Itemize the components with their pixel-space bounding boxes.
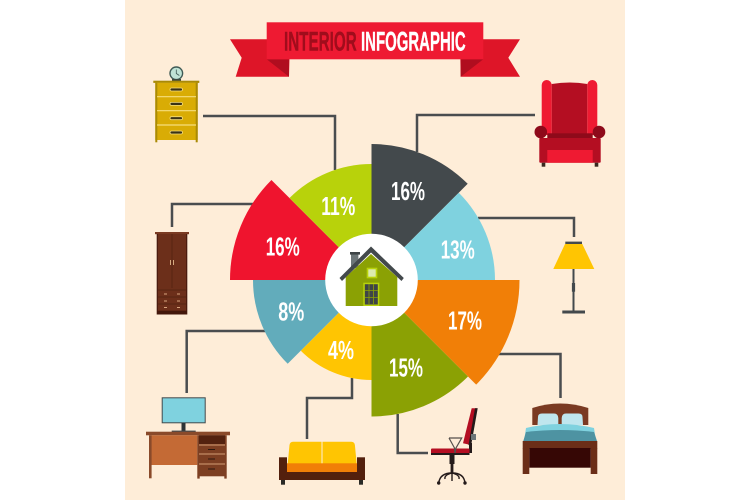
- label: 16% dark: 16%: [391, 176, 425, 206]
- icon: floor lamp: [553, 242, 594, 314]
- wedge: light blue 13%: [372, 193, 495, 280]
- title text: INFOGRAPHIC: [361, 27, 466, 57]
- center circle with house icon: [325, 234, 418, 326]
- connector lines: [172, 115, 574, 453]
- icon: computer desk: [146, 397, 230, 479]
- icon: armchair: [534, 80, 605, 167]
- wedge: orange 17%: [372, 280, 520, 385]
- icon: wardrobe: [155, 232, 189, 314]
- label: 13%: 13%: [441, 234, 475, 264]
- icon: bed: [523, 404, 597, 474]
- label: 11%: 11%: [321, 191, 355, 221]
- wedge: teal 8%: [253, 280, 372, 364]
- wedge: lime 11%: [290, 164, 372, 280]
- label: 8%: 8%: [278, 297, 304, 327]
- label: 17%: 17%: [448, 306, 482, 336]
- pie chart: [230, 144, 520, 416]
- wedge: dark 16%: [372, 144, 468, 280]
- wedge: olive 15%: [372, 280, 468, 416]
- icon: office chair: [431, 408, 478, 485]
- label: 4%: 4%: [328, 335, 354, 365]
- label: 15%: 15%: [389, 352, 423, 382]
- title ribbon: [230, 22, 520, 77]
- title text: INTERIOR: [284, 27, 357, 57]
- icon: dresser with clock: [153, 66, 199, 142]
- wedge: yellow 4%: [301, 280, 372, 380]
- wedge: red 16%: [230, 180, 372, 280]
- icon: sofa: [279, 442, 365, 485]
- label: 16% red: 16%: [266, 232, 300, 262]
